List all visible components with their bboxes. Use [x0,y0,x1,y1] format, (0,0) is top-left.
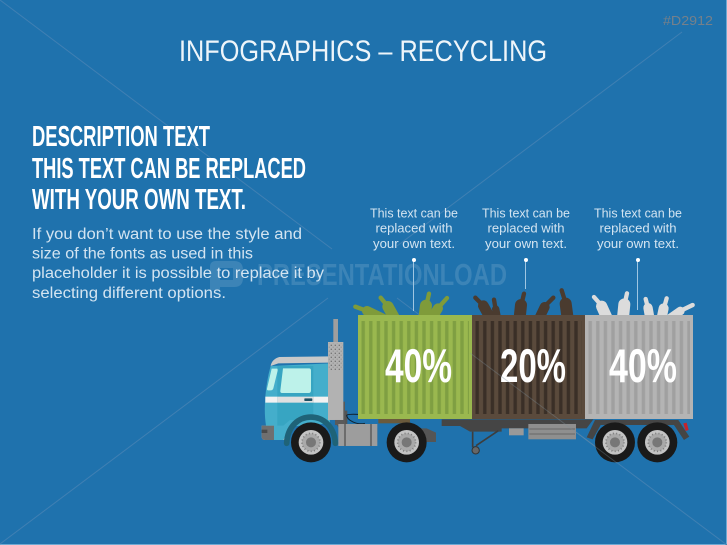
container: brown 20% [472,315,585,419]
rear tractor wheel [387,422,427,462]
watermark: PRESENTATIONLOAD [257,257,507,292]
container: green 40% [358,315,472,419]
body text: size of the fonts as used in this [32,246,253,262]
body text: selecting different options. [32,285,226,302]
callout: green share [370,206,458,311]
callout: white share [594,206,682,310]
tractor chassis [335,402,436,446]
callout: white share: your own text. [597,237,679,251]
heading: description text: DESCRIPTION TEXT [32,121,210,153]
callout: brown share: replaced with [488,222,565,236]
body text: If you don’t want to use the style and [32,226,302,243]
heading: description text [32,121,306,216]
container: white 40% [585,315,693,419]
front wheel [291,422,331,462]
cab body [265,363,330,440]
container: green 40%: 40% [385,339,452,392]
callout: white share: This text can be [594,206,682,220]
heading: description text: WITH YOUR OWN TEXT. [32,184,246,216]
front bumper [262,426,286,440]
callout: brown share: your own text. [485,237,567,251]
container: brown 20%: 20% [500,339,566,392]
bottles: brown [475,290,568,321]
callout: green share: replaced with [376,222,453,236]
body text: placeholder it is possible to replace it by [32,265,324,282]
callout: brown share: This text can be [482,206,570,220]
tractor cab [262,319,427,462]
trailer underframe and landing gear [442,419,689,454]
watermark [210,257,507,292]
windows [280,368,311,393]
trailer wheels [595,422,677,462]
stripe [265,397,277,403]
heading: description text: THIS TEXT CAN BE REPLACED [32,153,306,185]
document code: #D2912 [663,13,713,28]
exhaust stack [328,319,343,420]
callout: green share: your own text. [373,237,455,251]
fender [287,417,335,443]
callout: brown share [482,206,570,289]
bottles: green [355,294,447,321]
callout: white share: replaced with [600,222,677,236]
title: INFOGRAPHICS – RECYCLING [179,35,547,68]
callout: green share: This text can be [370,206,458,220]
body text [32,226,324,302]
bottles: white [594,293,693,321]
truck [262,290,693,462]
roof [271,356,329,366]
container: white 40%: 40% [609,339,677,392]
